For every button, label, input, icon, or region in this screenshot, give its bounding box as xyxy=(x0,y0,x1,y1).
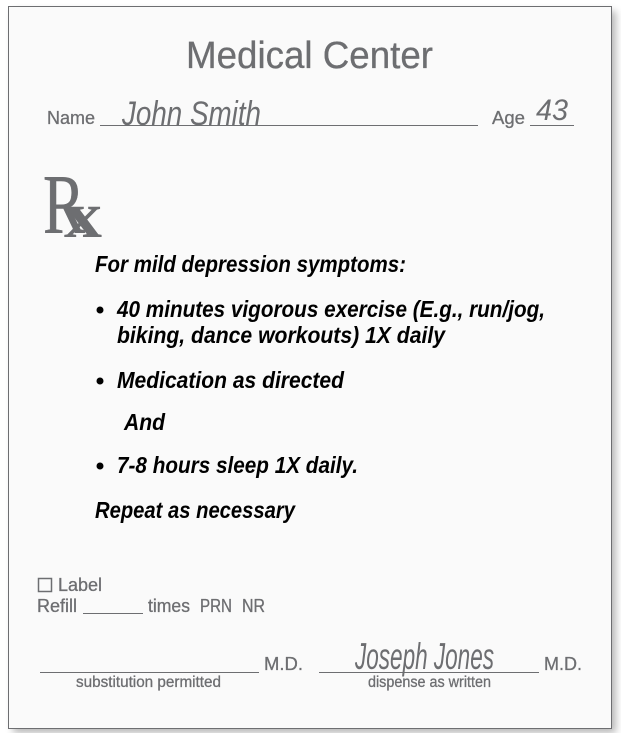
refill line: PRN xyxy=(200,595,232,616)
repeat note: Repeat as necessary xyxy=(95,497,296,523)
name field: Name xyxy=(47,107,95,128)
substitution signature line: M.D. xyxy=(264,653,303,674)
exercise bullet: 40 minutes vigorous exercise (E.g., run/jog, xyxy=(116,296,545,322)
dispense signature line: M.D. xyxy=(544,653,582,674)
and: And xyxy=(123,409,166,435)
dispense signature line: Joseph Jones xyxy=(354,636,494,677)
rx symbol: R xyxy=(43,158,85,252)
prescription text: For mild depression symptoms: xyxy=(95,251,406,277)
refill line: NR xyxy=(242,595,265,616)
refill line: times xyxy=(148,595,190,616)
medication bullet: Medication as directed xyxy=(117,367,345,393)
name field: John Smith xyxy=(121,95,261,133)
refill line: Refill xyxy=(37,595,77,616)
label checkbox xyxy=(38,574,102,595)
dispense signature line: dispense as written xyxy=(368,674,491,691)
refill line xyxy=(37,595,265,616)
exercise bullet: biking, dance workouts) 1X daily xyxy=(117,322,446,348)
title: Medical Center xyxy=(186,35,433,77)
age field: 43 xyxy=(536,94,568,127)
age field xyxy=(492,94,574,128)
age field: Age xyxy=(492,107,525,128)
name field xyxy=(47,95,478,133)
prescription text xyxy=(95,251,545,523)
exercise bullet xyxy=(96,296,545,348)
sleep bullet: 7-8 hours sleep 1X daily. xyxy=(117,452,358,478)
dispense signature line xyxy=(319,636,582,691)
substitution signature line xyxy=(40,653,303,691)
substitution signature line: substitution permitted xyxy=(76,674,221,691)
rx symbol: x xyxy=(64,179,102,252)
label checkbox: Label xyxy=(58,574,102,595)
